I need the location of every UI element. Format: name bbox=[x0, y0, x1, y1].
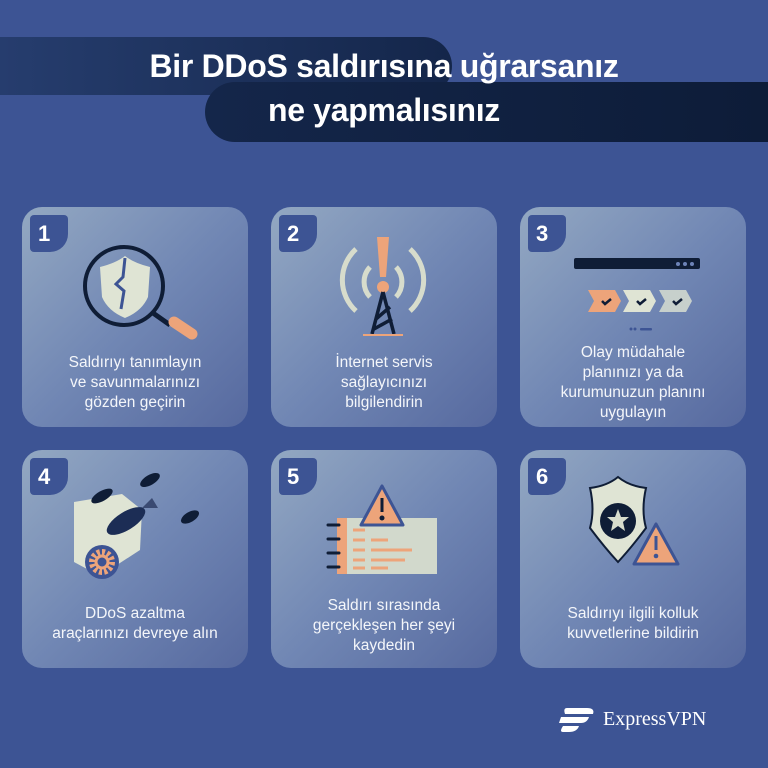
text 3: kurumunuzun planını bbox=[561, 384, 705, 401]
text 1: Saldırıyı tanımlayın bbox=[69, 354, 201, 371]
text 6: kuvvetlerine bildirin bbox=[567, 625, 699, 642]
text 6 bbox=[567, 605, 699, 642]
badge 4: 4 bbox=[38, 464, 50, 489]
text 5: Saldırı sırasında bbox=[328, 597, 440, 614]
badge 5 bbox=[279, 458, 317, 495]
text 2: bilgilendirin bbox=[345, 394, 423, 411]
text 1 bbox=[69, 354, 201, 411]
icon: logo mark bbox=[559, 708, 594, 732]
badge 4 bbox=[30, 458, 68, 495]
text 5: gerçekleşen her şeyi bbox=[313, 617, 455, 634]
text 3: uygulayın bbox=[600, 404, 666, 421]
icon: tower with warning bbox=[340, 237, 426, 336]
badge 6 bbox=[528, 458, 566, 495]
text 3: Olay müdahale bbox=[581, 344, 685, 361]
badge 2 bbox=[279, 215, 317, 252]
logo: ExpressVPN bbox=[559, 708, 706, 732]
badge 1: 1 bbox=[38, 221, 50, 246]
panel: step 5 bbox=[271, 450, 497, 668]
text 4 bbox=[52, 605, 218, 642]
text 3: planınızı ya da bbox=[583, 364, 683, 381]
title: Bir DDoS saldırısına uğrarsanız bbox=[149, 48, 619, 84]
title bbox=[149, 48, 619, 128]
text 4: DDoS azaltma bbox=[85, 605, 185, 622]
icon: magnifier over cracked shield bbox=[83, 245, 198, 340]
badge 3 bbox=[528, 215, 566, 252]
badge 3: 3 bbox=[536, 221, 548, 246]
text 5 bbox=[313, 597, 455, 654]
text 3 bbox=[561, 344, 705, 421]
icon: police badge with warning bbox=[588, 476, 680, 566]
panel: step 4 bbox=[22, 450, 248, 668]
text 2: sağlayıcınızı bbox=[341, 374, 427, 391]
text 1: gözden geçirin bbox=[85, 394, 185, 411]
text 2: İnternet servis bbox=[335, 354, 433, 371]
icon: shield with bombs and gear bbox=[74, 473, 200, 579]
badge 2: 2 bbox=[287, 221, 299, 246]
title: ne yapmalısınız bbox=[268, 92, 500, 128]
text 1: ve savunmalarınızı bbox=[70, 374, 200, 391]
text 4: araçlarınızı devreye alın bbox=[52, 625, 218, 642]
panel: step 1 bbox=[22, 207, 248, 427]
title banner bbox=[0, 37, 768, 142]
text 6: Saldırıyı ilgili kolluk bbox=[568, 605, 698, 622]
logo text: ExpressVPN bbox=[603, 708, 706, 730]
panel: step 2 bbox=[271, 207, 497, 427]
badge 1 bbox=[30, 215, 68, 252]
icon: plan progress bbox=[574, 258, 700, 330]
text 2 bbox=[335, 353, 433, 411]
icon: notebook with warning bbox=[326, 484, 437, 574]
panel: step 3 bbox=[520, 207, 746, 427]
badge 6: 6 bbox=[536, 464, 548, 489]
badge 5: 5 bbox=[287, 464, 299, 489]
panel: step 6 bbox=[520, 450, 746, 668]
text 5: kaydedin bbox=[353, 637, 415, 654]
